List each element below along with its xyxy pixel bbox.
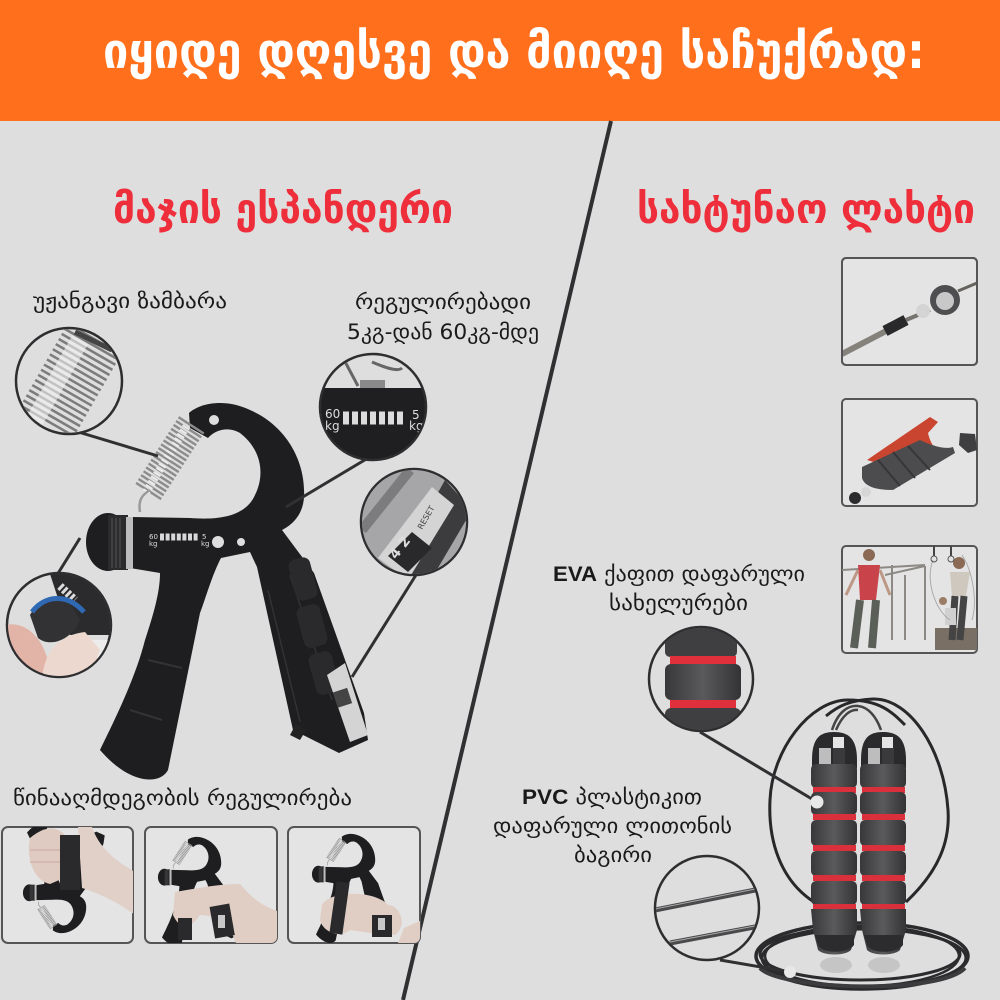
label: PVC cable	[493, 785, 732, 867]
rope loops	[770, 700, 905, 902]
left handle	[811, 732, 857, 954]
right handle	[860, 732, 906, 954]
callout: counter	[352, 468, 472, 677]
label: adjustable	[347, 290, 539, 344]
counter plate	[327, 663, 368, 742]
label: EVA handles	[553, 562, 805, 615]
reflections	[820, 957, 852, 973]
label: adjustable: 5კგ-დან 60კგ-მდე	[347, 320, 539, 344]
callout: EVA handle	[649, 625, 824, 808]
gripper scale: kg	[149, 540, 158, 548]
title: იყიდე დღესვე და მიიღე საჩუქრად:	[103, 23, 925, 80]
label: PVC cable: ბაგირი	[574, 843, 652, 867]
thumbnail 1	[2, 824, 135, 943]
thumbnail: handle cut	[842, 399, 977, 506]
label: EVA handles: EVA ქაფით დაფარული	[553, 562, 805, 586]
callout: kg scale: 60	[325, 407, 340, 421]
rope coil	[756, 923, 968, 989]
gripper scale: 60	[149, 533, 158, 541]
thumbnail: gym scene	[842, 546, 977, 653]
label: PVC cable: დაფარული ლითონის	[493, 814, 732, 838]
callout: counter: 4 2	[387, 533, 414, 562]
callout: counter: RESET	[416, 504, 437, 531]
callout: kg scale: kg	[325, 419, 340, 433]
label: resistance: წინააღმდეგობის რეგულირება	[13, 786, 352, 810]
thumbnail 3	[288, 827, 422, 943]
heading: jump rope: სახტუნაო ლახტი	[637, 185, 975, 233]
callout: kg scale	[286, 354, 426, 507]
callout: dial adjustment	[6, 538, 112, 685]
callout: spring	[16, 328, 158, 456]
gripper scale: 5	[202, 533, 206, 541]
thumbnail 2	[145, 827, 280, 946]
jump rope product	[756, 699, 968, 989]
label: spring: უჟანგავი ზამბარა	[33, 289, 227, 313]
callout: kg scale: kg	[409, 419, 424, 433]
callout: PVC cable	[655, 856, 796, 978]
label: adjustable: რეგულირებადი	[355, 290, 531, 314]
callout: kg scale: 5	[412, 408, 420, 422]
header band	[0, 0, 1000, 121]
thumbnail: rope bearing	[842, 258, 977, 365]
gripper product	[86, 403, 368, 780]
heading: hand gripper: მაჯის ესპანდერი	[113, 185, 453, 233]
label: PVC cable: PVC პლასტიკით	[522, 785, 702, 809]
label: EVA handles: სახელურები	[609, 591, 748, 615]
gripper scale: kg	[201, 540, 210, 548]
gripper scale	[149, 415, 245, 548]
